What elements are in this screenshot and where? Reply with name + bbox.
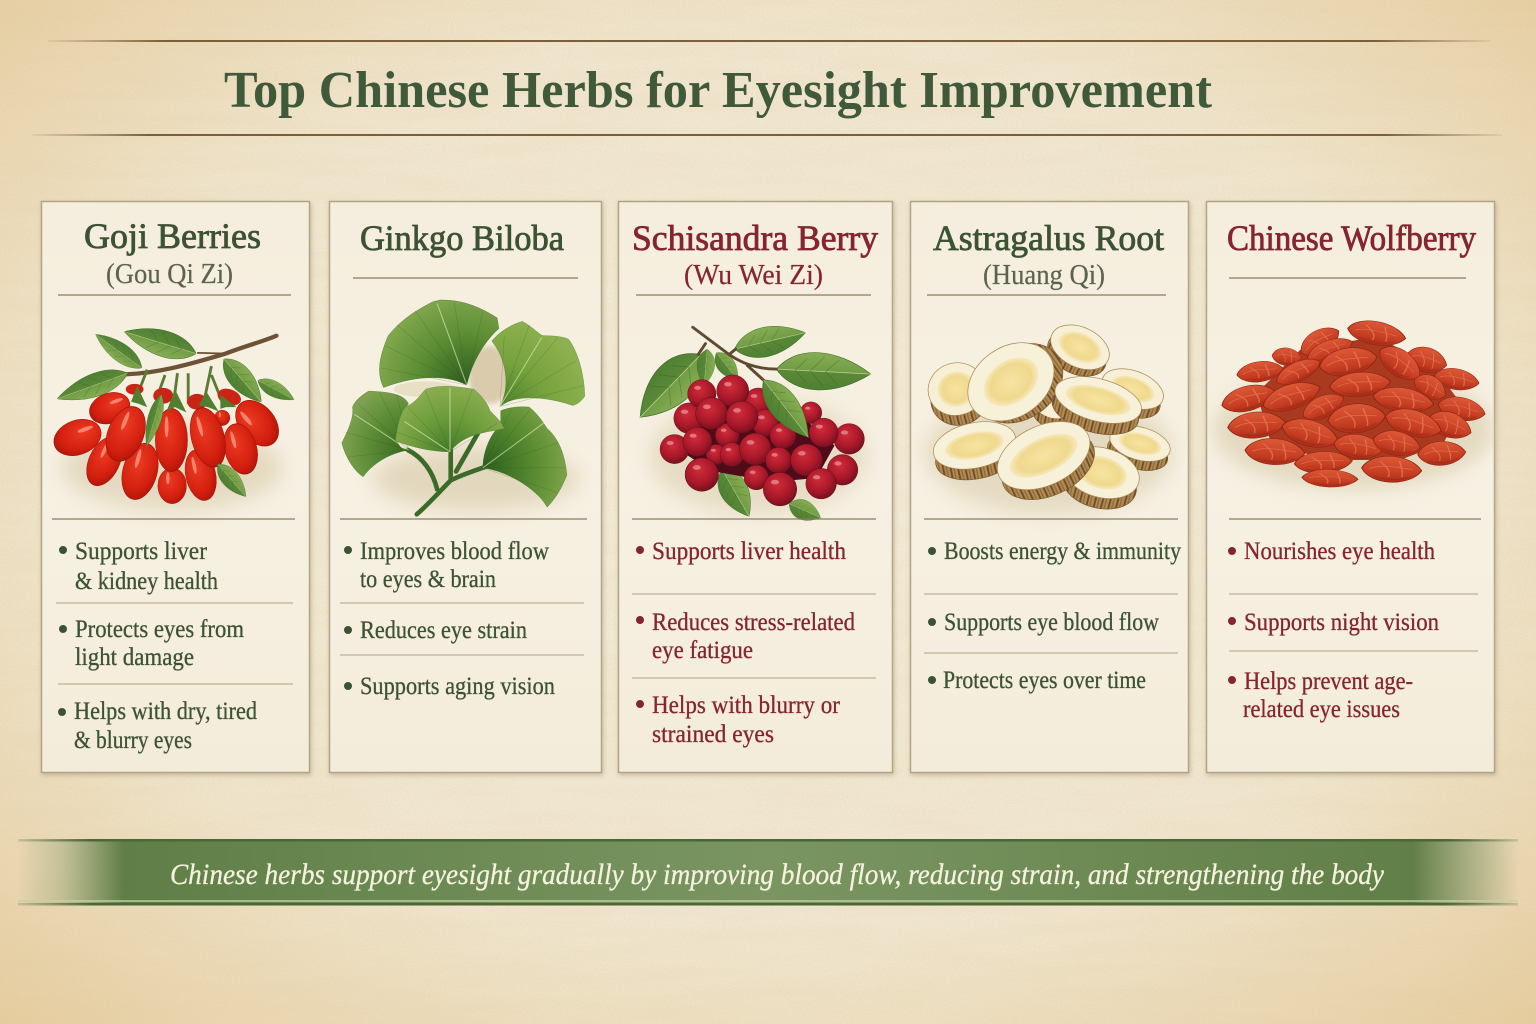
bullet list: Helps prevent age- — [1244, 668, 1413, 695]
icon: schisandra berry cluster — [625, 318, 872, 527]
bullet list: & blurry eyes — [74, 727, 192, 754]
icon: dried wolfberries pile — [1213, 317, 1493, 490]
icon: ginkgo leaves — [342, 300, 585, 514]
bullet list: Helps with blurry or — [652, 692, 841, 719]
fan leaf top — [379, 300, 499, 387]
heading: Astragalus Root: Astragalus Root — [933, 218, 1164, 258]
heading: Chinese Wolfberry: Chinese Wolfberry — [1227, 218, 1476, 258]
bullet list — [56, 538, 293, 754]
bullet list: related eye issues — [1243, 696, 1400, 723]
bullet list: to eyes & brain — [360, 566, 496, 593]
banner text: Chinese herbs support eyesight gradually by improving blood flow, reducing strain, and strengthening the body — [170, 858, 1385, 891]
bullet list — [1228, 538, 1478, 723]
subheading: Wu Wei Zi: (Wu Wei Zi) — [684, 260, 823, 291]
bullet list: Reduces stress-related — [652, 609, 855, 636]
bullet list: Protects eyes from — [75, 616, 245, 643]
fan leaf left — [342, 391, 409, 477]
heading: Goji Berries: Goji Berries — [84, 216, 261, 256]
bullet list: Supports liver — [75, 538, 208, 565]
bullet list: Boosts energy & immunity — [944, 538, 1181, 565]
bullet list: Supports night vision — [1244, 609, 1439, 636]
bullet list: & kidney health — [75, 568, 218, 595]
bullet list: Reduces eye strain — [360, 617, 527, 644]
bullet list — [340, 538, 584, 700]
heading: Schisandra Berry: Schisandra Berry — [632, 218, 878, 258]
bullet list: Supports liver health — [652, 538, 846, 565]
subheading: Huang Qi: (Huang Qi) — [983, 260, 1105, 291]
bullet list: Protects eyes over time — [943, 667, 1146, 694]
bullet list: Helps with dry, tired — [74, 698, 257, 725]
panel: astragalus root — [910, 202, 1188, 772]
fan leaf center — [395, 386, 504, 452]
bullet list: Supports aging vision — [360, 673, 555, 700]
fan leaf right — [492, 321, 585, 406]
subheading: Gou Qi Zi: (Gou Qi Zi) — [106, 259, 233, 290]
bullet list: strained eyes — [652, 721, 774, 748]
heading: Ginkgo Biloba: Ginkgo Biloba — [360, 218, 564, 258]
title: Top Chinese Herbs for Eyesight Improvement — [224, 62, 1213, 119]
bullet list — [924, 538, 1181, 694]
fan leaf lower right — [483, 407, 567, 507]
icon: astragalus root slices — [922, 316, 1174, 517]
bullet list: light damage — [75, 644, 194, 671]
panel: chinese wolfberry — [1206, 202, 1494, 772]
bullet list: eye fatigue — [652, 637, 753, 664]
bullet list — [632, 538, 876, 748]
panel: goji berries — [42, 202, 310, 772]
bullet list: Improves blood flow — [360, 538, 549, 565]
bullet list: Nourishes eye health — [1244, 538, 1435, 565]
footer banner — [18, 839, 1518, 906]
bullet list: Supports eye blood flow — [944, 609, 1159, 636]
icon: goji berry branch — [49, 319, 298, 511]
panel: schisandra berry — [618, 202, 892, 772]
panel: ginkgo biloba — [330, 202, 602, 772]
